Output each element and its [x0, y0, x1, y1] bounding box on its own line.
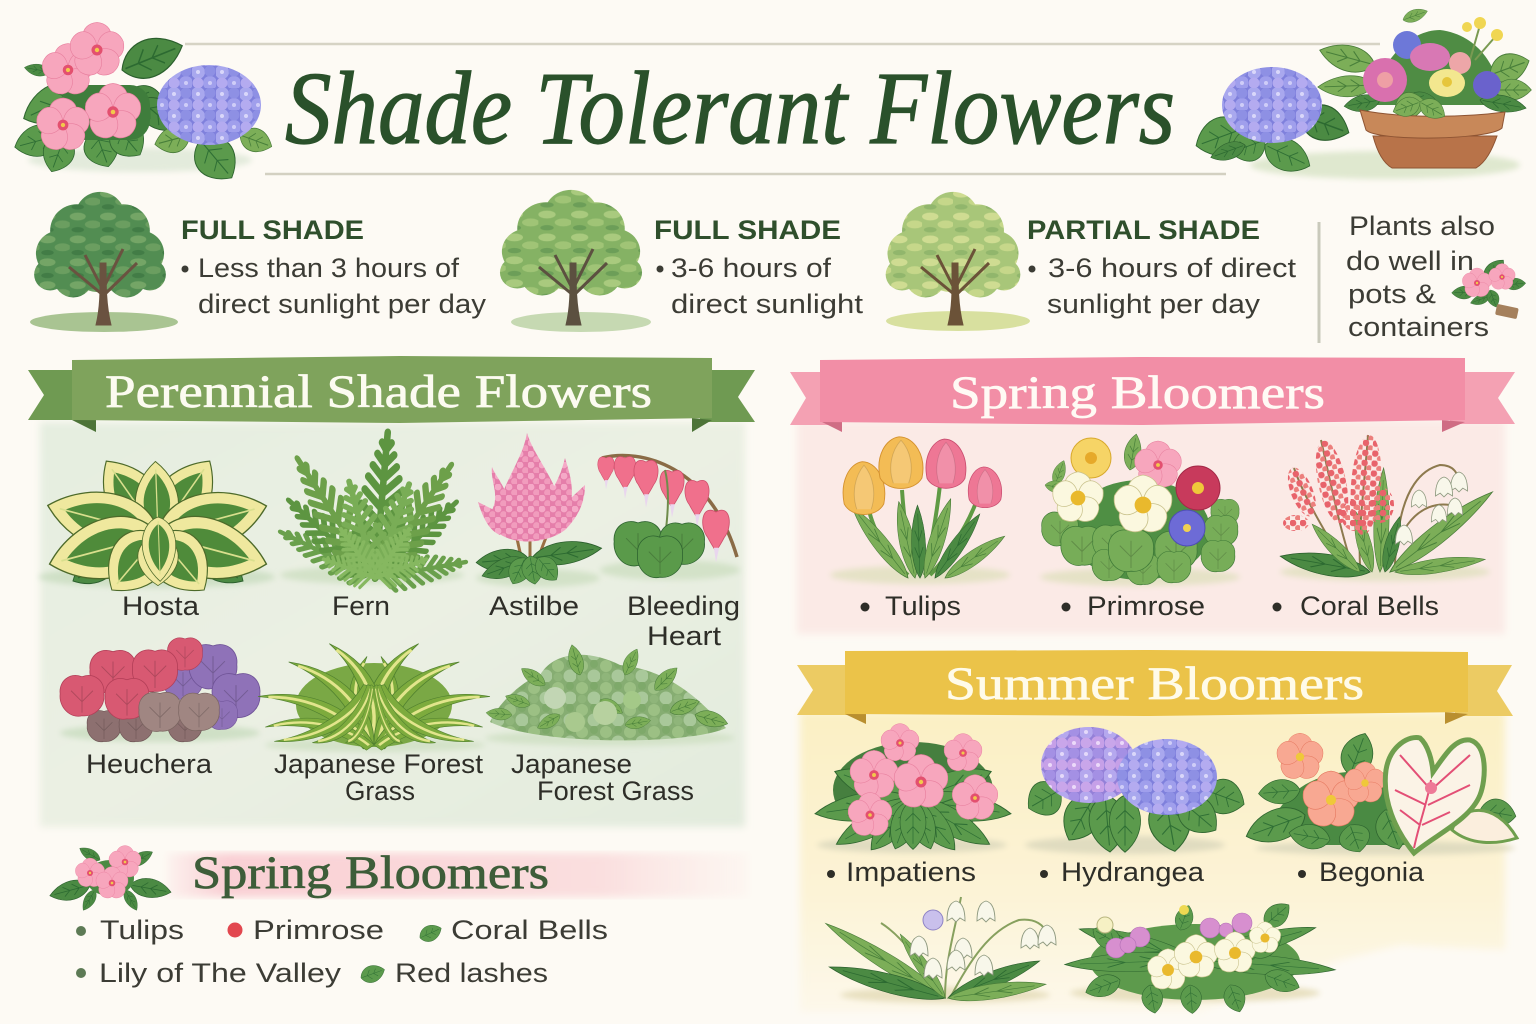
plant: heuchera — [60, 638, 260, 742]
text: lower perennial labels — [86, 749, 694, 806]
panel: spring bloomers list: Red lashes — [395, 958, 548, 988]
text: perennial labels — [122, 591, 740, 651]
text: lower perennial labels: Japanese Forest — [274, 749, 484, 779]
plant: tulips — [830, 437, 1010, 584]
plant: primrose — [1040, 433, 1240, 586]
plant: light green shrub — [486, 643, 730, 740]
text: spring labels: Tulips — [885, 591, 961, 621]
legend: full shade under 3 hours: direct sunlight per day — [198, 289, 487, 319]
panel: spring bloomers list: Spring Bloomers — [192, 847, 549, 899]
legend: full shade under 3 hours: FULL SHADE — [181, 215, 364, 245]
plant: coral bells — [1279, 434, 1498, 583]
icon: small flowers — [1451, 255, 1526, 319]
icon: hydrangea and potted flowers, top right — [1190, 5, 1534, 180]
banner: spring bloomers — [790, 357, 1515, 432]
note: plants in pots: containers — [1348, 312, 1489, 342]
plant: japanese forest grass — [258, 643, 490, 776]
banner: spring bloomers: Spring Bloomers — [950, 367, 1325, 419]
icon: dark tree — [30, 192, 178, 332]
text: lower perennial labels: Grass — [345, 776, 415, 806]
text: lower perennial labels: Japanese — [511, 749, 632, 779]
legend: full shade under 3 hours — [30, 192, 487, 332]
panel: summer bloomers — [797, 650, 1518, 1015]
text: spring labels: Coral Bells — [1300, 591, 1439, 621]
legend: partial shade: PARTIAL SHADE — [1027, 215, 1260, 245]
legend: full shade 3-6 hours: direct sunlight — [671, 289, 864, 319]
icon: medium tree — [500, 190, 651, 332]
panel: spring bloomers list: Tulips — [100, 915, 184, 945]
plant: begonia and caladium — [1241, 728, 1518, 857]
legend: full shade under 3 hours: Less than 3 hours of — [198, 253, 460, 283]
text: summer labels — [827, 857, 1425, 887]
plant: lily of the valley — [821, 897, 1056, 1007]
panel: spring bloomers list: Lily of The Valley — [99, 958, 342, 988]
banner: summer bloomers: Summer Bloomers — [945, 658, 1364, 710]
title: Shade Tolerant Flowers — [285, 51, 1175, 166]
note: plants in pots: do well in — [1346, 246, 1474, 276]
icon: pink impatiens and hydrangea, top left — [11, 22, 276, 191]
text: lower perennial labels: Forest Grass — [537, 776, 694, 806]
text: perennial labels: Hosta — [122, 591, 200, 621]
legend: partial shade — [886, 192, 1297, 331]
note: plants in pots: pots & — [1348, 279, 1436, 309]
banner: perennial shade flowers: Perennial Shade Flowers — [105, 366, 652, 418]
panel: spring bloomers list: Coral Bells — [451, 915, 608, 945]
text: summer labels: Begonia — [1319, 857, 1425, 887]
legend: full shade 3-6 hours — [500, 190, 864, 332]
text: perennial labels: Fern — [332, 591, 390, 621]
plant: fern — [274, 430, 468, 594]
panel: spring bloomers list — [47, 844, 748, 988]
text: summer labels: Hydrangea — [1061, 857, 1205, 887]
icon: spring flowers — [47, 844, 173, 913]
plant: hosta — [40, 446, 274, 607]
panel: perennial shade flowers — [28, 356, 755, 827]
text: lower perennial labels: Heuchera — [86, 749, 213, 779]
plant: bleeding heart — [598, 455, 737, 578]
text: perennial labels: Astilbe — [489, 591, 579, 621]
banner: perennial shade flowers — [28, 356, 755, 432]
panel: spring bloomers — [790, 357, 1515, 634]
text: spring labels — [860, 591, 1439, 621]
plant: astilbe — [475, 433, 603, 588]
panel: spring bloomers list: Primrose — [253, 915, 384, 945]
banner: summer bloomers — [797, 650, 1513, 724]
note: plants in pots: Plants also — [1349, 211, 1495, 241]
note: plants in pots — [1319, 211, 1526, 343]
legend: partial shade: sunlight per day — [1047, 289, 1261, 319]
legend: full shade 3-6 hours: 3-6 hours of — [671, 253, 832, 283]
icon: light tree — [886, 192, 1030, 331]
text: perennial labels: Bleeding — [627, 591, 740, 621]
plant: white and pink flower mound — [1065, 897, 1336, 1015]
text: summer labels: Impatiens — [846, 857, 976, 887]
text: spring labels: Primrose — [1087, 591, 1205, 621]
legend: full shade 3-6 hours: FULL SHADE — [654, 215, 841, 245]
legend: partial shade: 3-6 hours of direct — [1048, 253, 1297, 283]
plant: impatiens — [813, 724, 1013, 858]
text: perennial labels: Heart — [647, 621, 722, 651]
plant: hydrangea — [1020, 727, 1250, 855]
